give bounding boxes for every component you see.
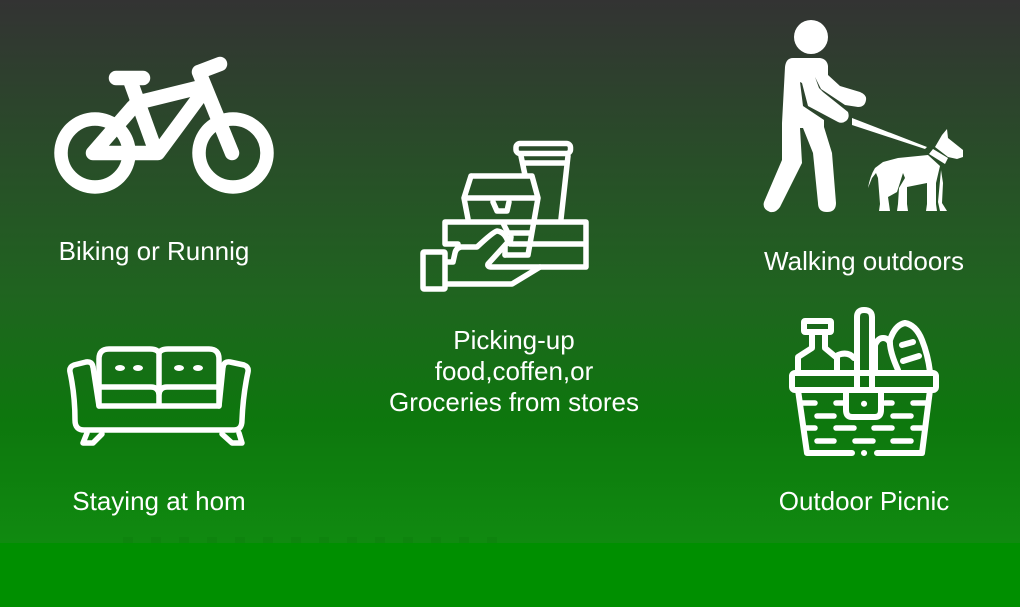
label: picnic: Outdoor Picnic bbox=[779, 486, 949, 516]
label: picking up: Groceries from stores bbox=[389, 387, 639, 417]
label: walking: Walking outdoors bbox=[764, 246, 964, 276]
icon: takeout food bbox=[423, 144, 586, 289]
label: picking up: food,coffen,or bbox=[435, 356, 593, 386]
label: picking up: Picking-up bbox=[453, 325, 575, 355]
icon: sofa bbox=[70, 349, 248, 443]
label: biking: Biking or Runnig bbox=[59, 236, 249, 266]
icon: bicycle bbox=[61, 64, 267, 187]
label: staying at home: Staying at hom bbox=[72, 486, 246, 516]
icon: picnic basket bbox=[792, 310, 936, 453]
icon: person walking dog bbox=[764, 20, 963, 212]
label: picking up bbox=[389, 325, 639, 417]
